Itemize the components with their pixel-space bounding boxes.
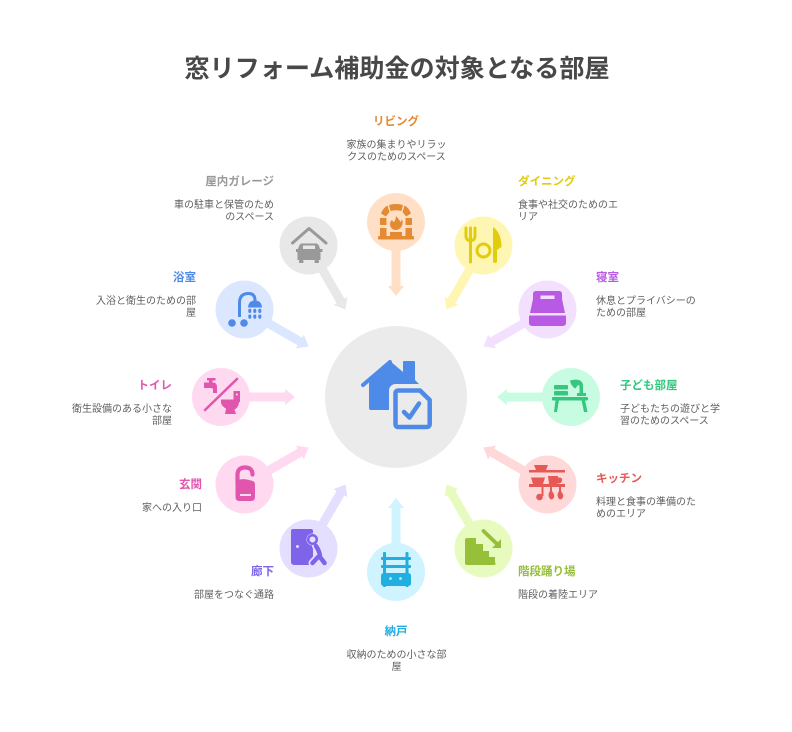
label: garage: のスペース xyxy=(225,212,274,223)
label: landing: 階段の着陸エリア xyxy=(518,588,598,601)
label: storage: 屋 xyxy=(392,661,402,673)
label: living: リビング xyxy=(373,114,419,128)
label: kids room: 子ども部屋 xyxy=(620,378,678,392)
node: bath shower xyxy=(216,280,274,338)
node: toilet and faucet xyxy=(192,368,250,426)
node: corridor door and person xyxy=(280,520,338,578)
label: bedroom: 寝室 xyxy=(596,270,619,284)
label: entrance: 玄関 xyxy=(179,477,202,491)
node: entrance door hanger xyxy=(216,456,274,514)
label: dining: ダイニング xyxy=(518,174,576,188)
center circle with house icon xyxy=(325,326,467,468)
arrow: dining xyxy=(440,266,476,314)
label: bath xyxy=(96,270,196,319)
node: dining utensils xyxy=(454,216,512,274)
label: bath: 屋 xyxy=(186,307,196,319)
label: landing xyxy=(518,564,598,601)
label: storage: 収納のための小さな部 xyxy=(346,648,446,661)
node: stair landing xyxy=(454,520,512,578)
label: living xyxy=(346,114,446,163)
node: kitchen shelf xyxy=(518,456,576,514)
label: storage xyxy=(346,624,446,673)
label: dining: 食事や社交のためのエ xyxy=(518,198,618,211)
label: storage: 納戸 xyxy=(384,624,408,638)
label: toilet xyxy=(72,379,172,427)
arrow: kitchen xyxy=(479,441,527,477)
arrow: garage xyxy=(316,266,352,314)
node: garage car xyxy=(280,216,338,274)
arrow: living xyxy=(388,250,404,296)
label: dining: リア xyxy=(518,212,538,223)
label: garage xyxy=(174,174,274,223)
label: kitchen: 料理と食事の準備のた xyxy=(596,495,696,508)
label: bedroom xyxy=(596,270,696,319)
label: bedroom: 休息とプライバシーの xyxy=(596,294,696,307)
label: bath: 入浴と衛生のための部 xyxy=(96,294,196,307)
node: bedroom bed xyxy=(518,280,576,338)
label: kitchen: めのエリア xyxy=(596,508,646,520)
arrow: bath xyxy=(265,317,313,353)
arrow: toilet xyxy=(249,389,295,405)
node: storage rack xyxy=(367,543,425,601)
label: kitchen xyxy=(596,472,696,520)
label: toilet: 部屋 xyxy=(152,415,172,427)
node: living fireplace xyxy=(367,193,425,251)
label: living: 家族の集まりやリラッ xyxy=(346,138,446,151)
label: entrance: 家への入り口 xyxy=(142,501,202,514)
title: 窓リフォーム補助金の対象となる部屋 xyxy=(184,55,610,83)
label: kitchen: キッチン xyxy=(596,472,642,485)
label: landing: 階段踊り場 xyxy=(518,564,576,578)
label: corridor: 廊下 xyxy=(251,564,274,578)
arrow: landing xyxy=(440,480,476,528)
label: entrance xyxy=(142,477,202,514)
label: corridor: 部屋をつなぐ通路 xyxy=(194,588,274,601)
arrow: bedroom xyxy=(479,317,527,353)
label: kids room: 子どもたちの遊びと学 xyxy=(620,402,720,415)
label: bath: 浴室 xyxy=(173,270,196,284)
label: garage: 屋内ガレージ xyxy=(205,174,274,188)
label: kids room: 習のためのスペース xyxy=(620,415,709,427)
arrow: storage xyxy=(388,498,404,544)
arrow: corridor xyxy=(316,480,352,528)
label: corridor xyxy=(194,564,274,601)
label: dining xyxy=(518,174,618,223)
label: toilet: トイレ xyxy=(138,379,172,392)
label: toilet: 衛生設備のある小さな xyxy=(72,402,172,415)
label: kids room xyxy=(620,378,720,427)
node: kids room desk xyxy=(542,368,600,426)
label: bedroom: ための部屋 xyxy=(596,307,646,319)
arrow: entrance xyxy=(265,441,313,477)
arrow: kids room xyxy=(497,389,543,405)
label: living: クスのためのスペース xyxy=(347,151,446,163)
label: garage: 車の駐車と保管のため xyxy=(174,198,274,211)
